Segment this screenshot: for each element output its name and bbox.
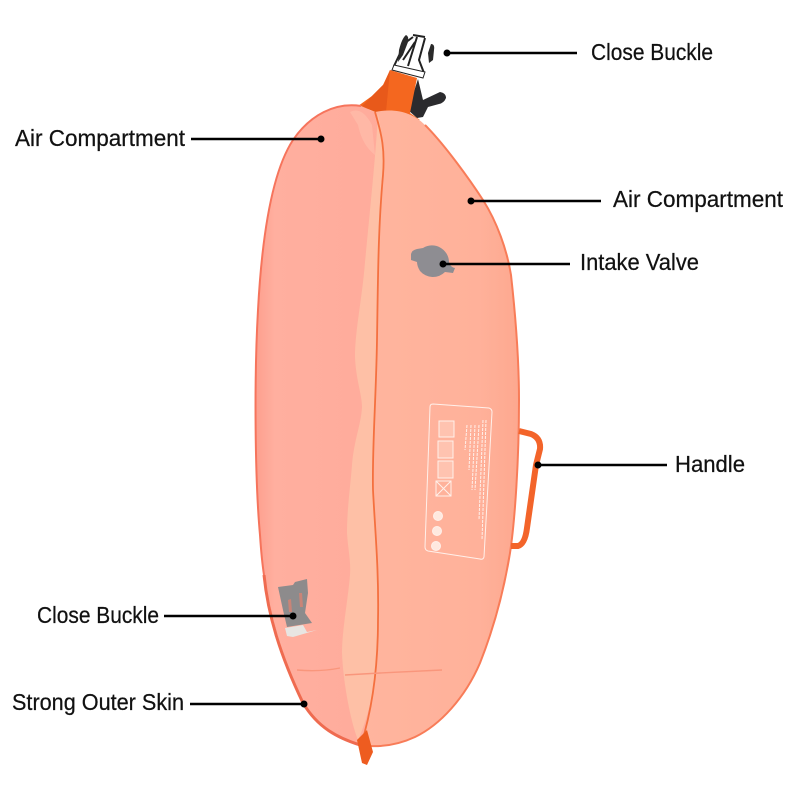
callout: air compartment right [468,186,784,212]
bottom tip [357,730,373,765]
label text lines [465,420,486,540]
icon: handle [511,431,540,546]
callout: close buckle lower [37,602,296,628]
top left highlight [350,111,375,155]
icon: lower close buckle [278,579,317,637]
buckle white band [392,65,425,78]
callout: close buckle top: Close Buckle [591,39,713,65]
callout: intake valve: Intake Valve [580,249,699,275]
buckle frame [394,35,425,73]
center fold strip [342,114,384,740]
callout: handle: Handle [675,451,745,477]
icon: warning label [425,404,492,559]
callout: intake valve [440,249,699,275]
icon: top close buckle [358,35,446,120]
callout: close buckle top [444,39,713,65]
callout: air compartment left: Air Compartment [15,125,186,151]
callout: strong outer skin [12,689,308,715]
callout: handle [534,451,745,477]
orange strap [358,70,420,120]
center seam [361,112,384,745]
dark side clip [408,79,446,118]
bottom crease [297,668,442,675]
label pictograms [439,421,454,437]
callout: close buckle lower: Close Buckle [37,602,159,628]
icon: intake valve [411,245,455,277]
callout: air compartment left [15,125,324,151]
callout: strong outer skin: Strong Outer Skin [12,689,184,715]
right lobe [360,111,519,746]
callout: air compartment right: Air Compartment [613,186,784,212]
right outline [368,125,519,746]
panel: buoy body [256,105,519,765]
left outline [256,105,361,575]
buckle grips [398,35,408,62]
left lobe [256,105,384,745]
strong outer skin edge [264,575,360,745]
